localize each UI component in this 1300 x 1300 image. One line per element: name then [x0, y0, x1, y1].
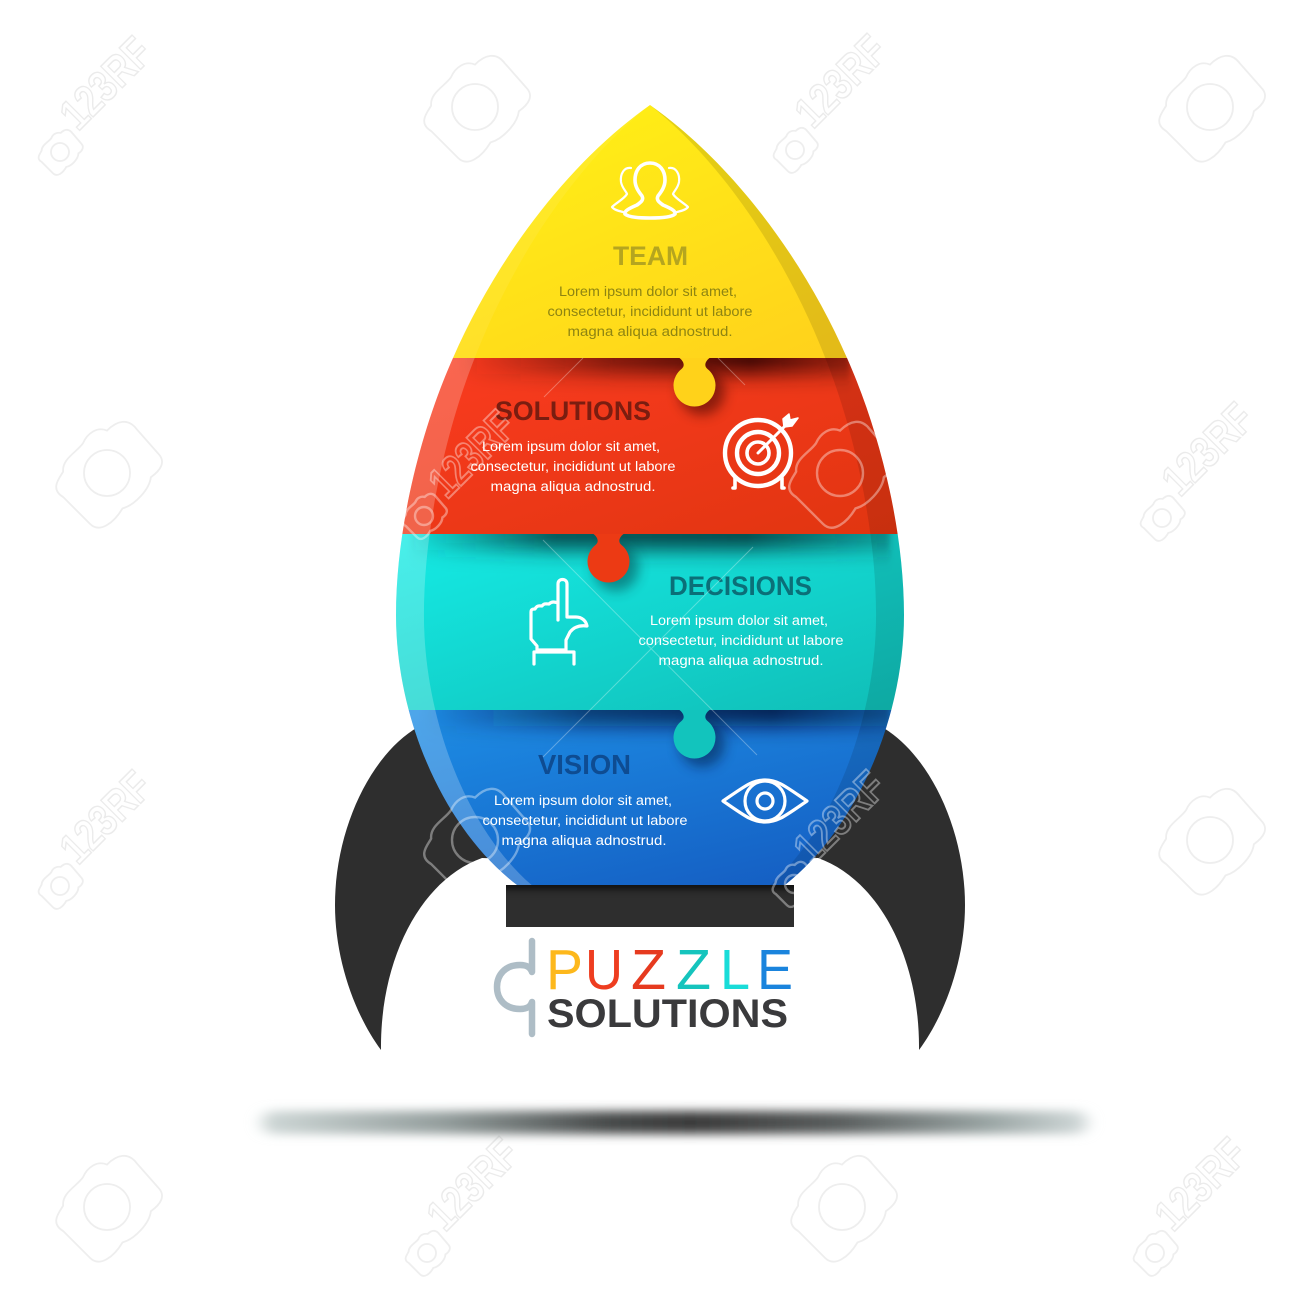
- puzzle tab: yellow: [674, 358, 716, 406]
- heading: team: TEAM: [613, 241, 688, 271]
- text block: solutions: Lorem ipsum dolor sit amet,: [482, 439, 660, 454]
- text block: team: [548, 284, 752, 339]
- yellow segment: [453, 105, 847, 358]
- text block: vision: consectetur, incididunt ut labore: [482, 813, 688, 828]
- text block: solutions: [470, 439, 676, 494]
- logo word: puzzle: E: [757, 938, 793, 1002]
- logo word: puzzle: P: [546, 938, 583, 1002]
- watermarks behind the rocket: 123RF: [50, 28, 161, 139]
- shadow cast on red segment: [467, 358, 852, 423]
- watermarks over the rocket: 123RF: [419, 402, 525, 507]
- text block: decisions: [638, 613, 844, 668]
- panel: team: [453, 105, 852, 423]
- logo word: puzzle: U: [585, 938, 623, 1002]
- teal segment: [380, 534, 920, 710]
- watermarks behind the rocket: 123RF: [417, 1129, 528, 1240]
- text block: solutions: magna aliqua adnostrud.: [490, 479, 656, 494]
- rocket right fin: [760, 720, 965, 1050]
- rocket left fin: [335, 720, 540, 1050]
- puzzle tab: teal: [674, 710, 716, 758]
- logo: [497, 938, 793, 1036]
- logo word: puzzle: [546, 938, 793, 1002]
- rocket side highlights: [380, 100, 920, 900]
- panel: decisions: [380, 534, 920, 767]
- logo icon: puzzle piece outline: [497, 941, 532, 1034]
- heading: decisions: DECISIONS: [669, 571, 812, 601]
- text block: team: magna aliqua adnostrud.: [568, 324, 732, 339]
- watermarks over the rocket: 123RF: [784, 762, 895, 873]
- text block: decisions: Lorem ipsum dolor sit amet,: [650, 613, 828, 628]
- text block: vision: Lorem ipsum dolor sit amet,: [494, 793, 672, 808]
- watermarks behind the rocket: 123RF: [50, 762, 161, 873]
- watermarks over the rocket: [398, 358, 905, 910]
- watermarks behind the rocket: 123RF: [1152, 394, 1263, 505]
- heading: solutions: SOLUTIONS: [495, 396, 651, 426]
- red segment: [380, 358, 920, 534]
- puzzle tab: red: [587, 534, 630, 582]
- ground shadow: [262, 1111, 1087, 1134]
- icon: target with arrow: [725, 414, 798, 488]
- text block: decisions: magna aliqua adnostrud.: [658, 653, 824, 668]
- icon: pointing hand: [531, 580, 587, 664]
- blue segment: [408, 710, 892, 885]
- logo word: puzzle: Z: [676, 938, 711, 1002]
- text block: solutions: consectetur, incididunt ut labore: [470, 459, 676, 474]
- icon: eye: [723, 780, 807, 822]
- rocket nozzle: [506, 885, 794, 927]
- shadow cast on teal segment: [412, 534, 893, 598]
- panel: vision: [408, 710, 892, 885]
- text block: vision: [482, 793, 688, 848]
- logo word: puzzle: L: [720, 938, 750, 1002]
- text block: decisions: consectetur, incididunt ut labore: [638, 633, 844, 648]
- text block: vision: magna aliqua adnostrud.: [502, 833, 666, 848]
- watermarks behind the rocket: 123RF: [1145, 1129, 1256, 1240]
- logo word: solutions: SOLUTIONS: [547, 992, 788, 1036]
- text block: team: consectetur, incididunt ut labore: [548, 304, 752, 319]
- watermarks behind the rocket: 123RF: [785, 26, 896, 137]
- icon: team of people: [612, 163, 688, 218]
- logo word: puzzle: Z: [631, 938, 666, 1002]
- heading: vision: VISION: [538, 749, 631, 780]
- text block: team: Lorem ipsum dolor sit amet,: [559, 284, 737, 299]
- shadow cast on blue segment: [436, 710, 892, 774]
- panel: solutions: [380, 358, 920, 591]
